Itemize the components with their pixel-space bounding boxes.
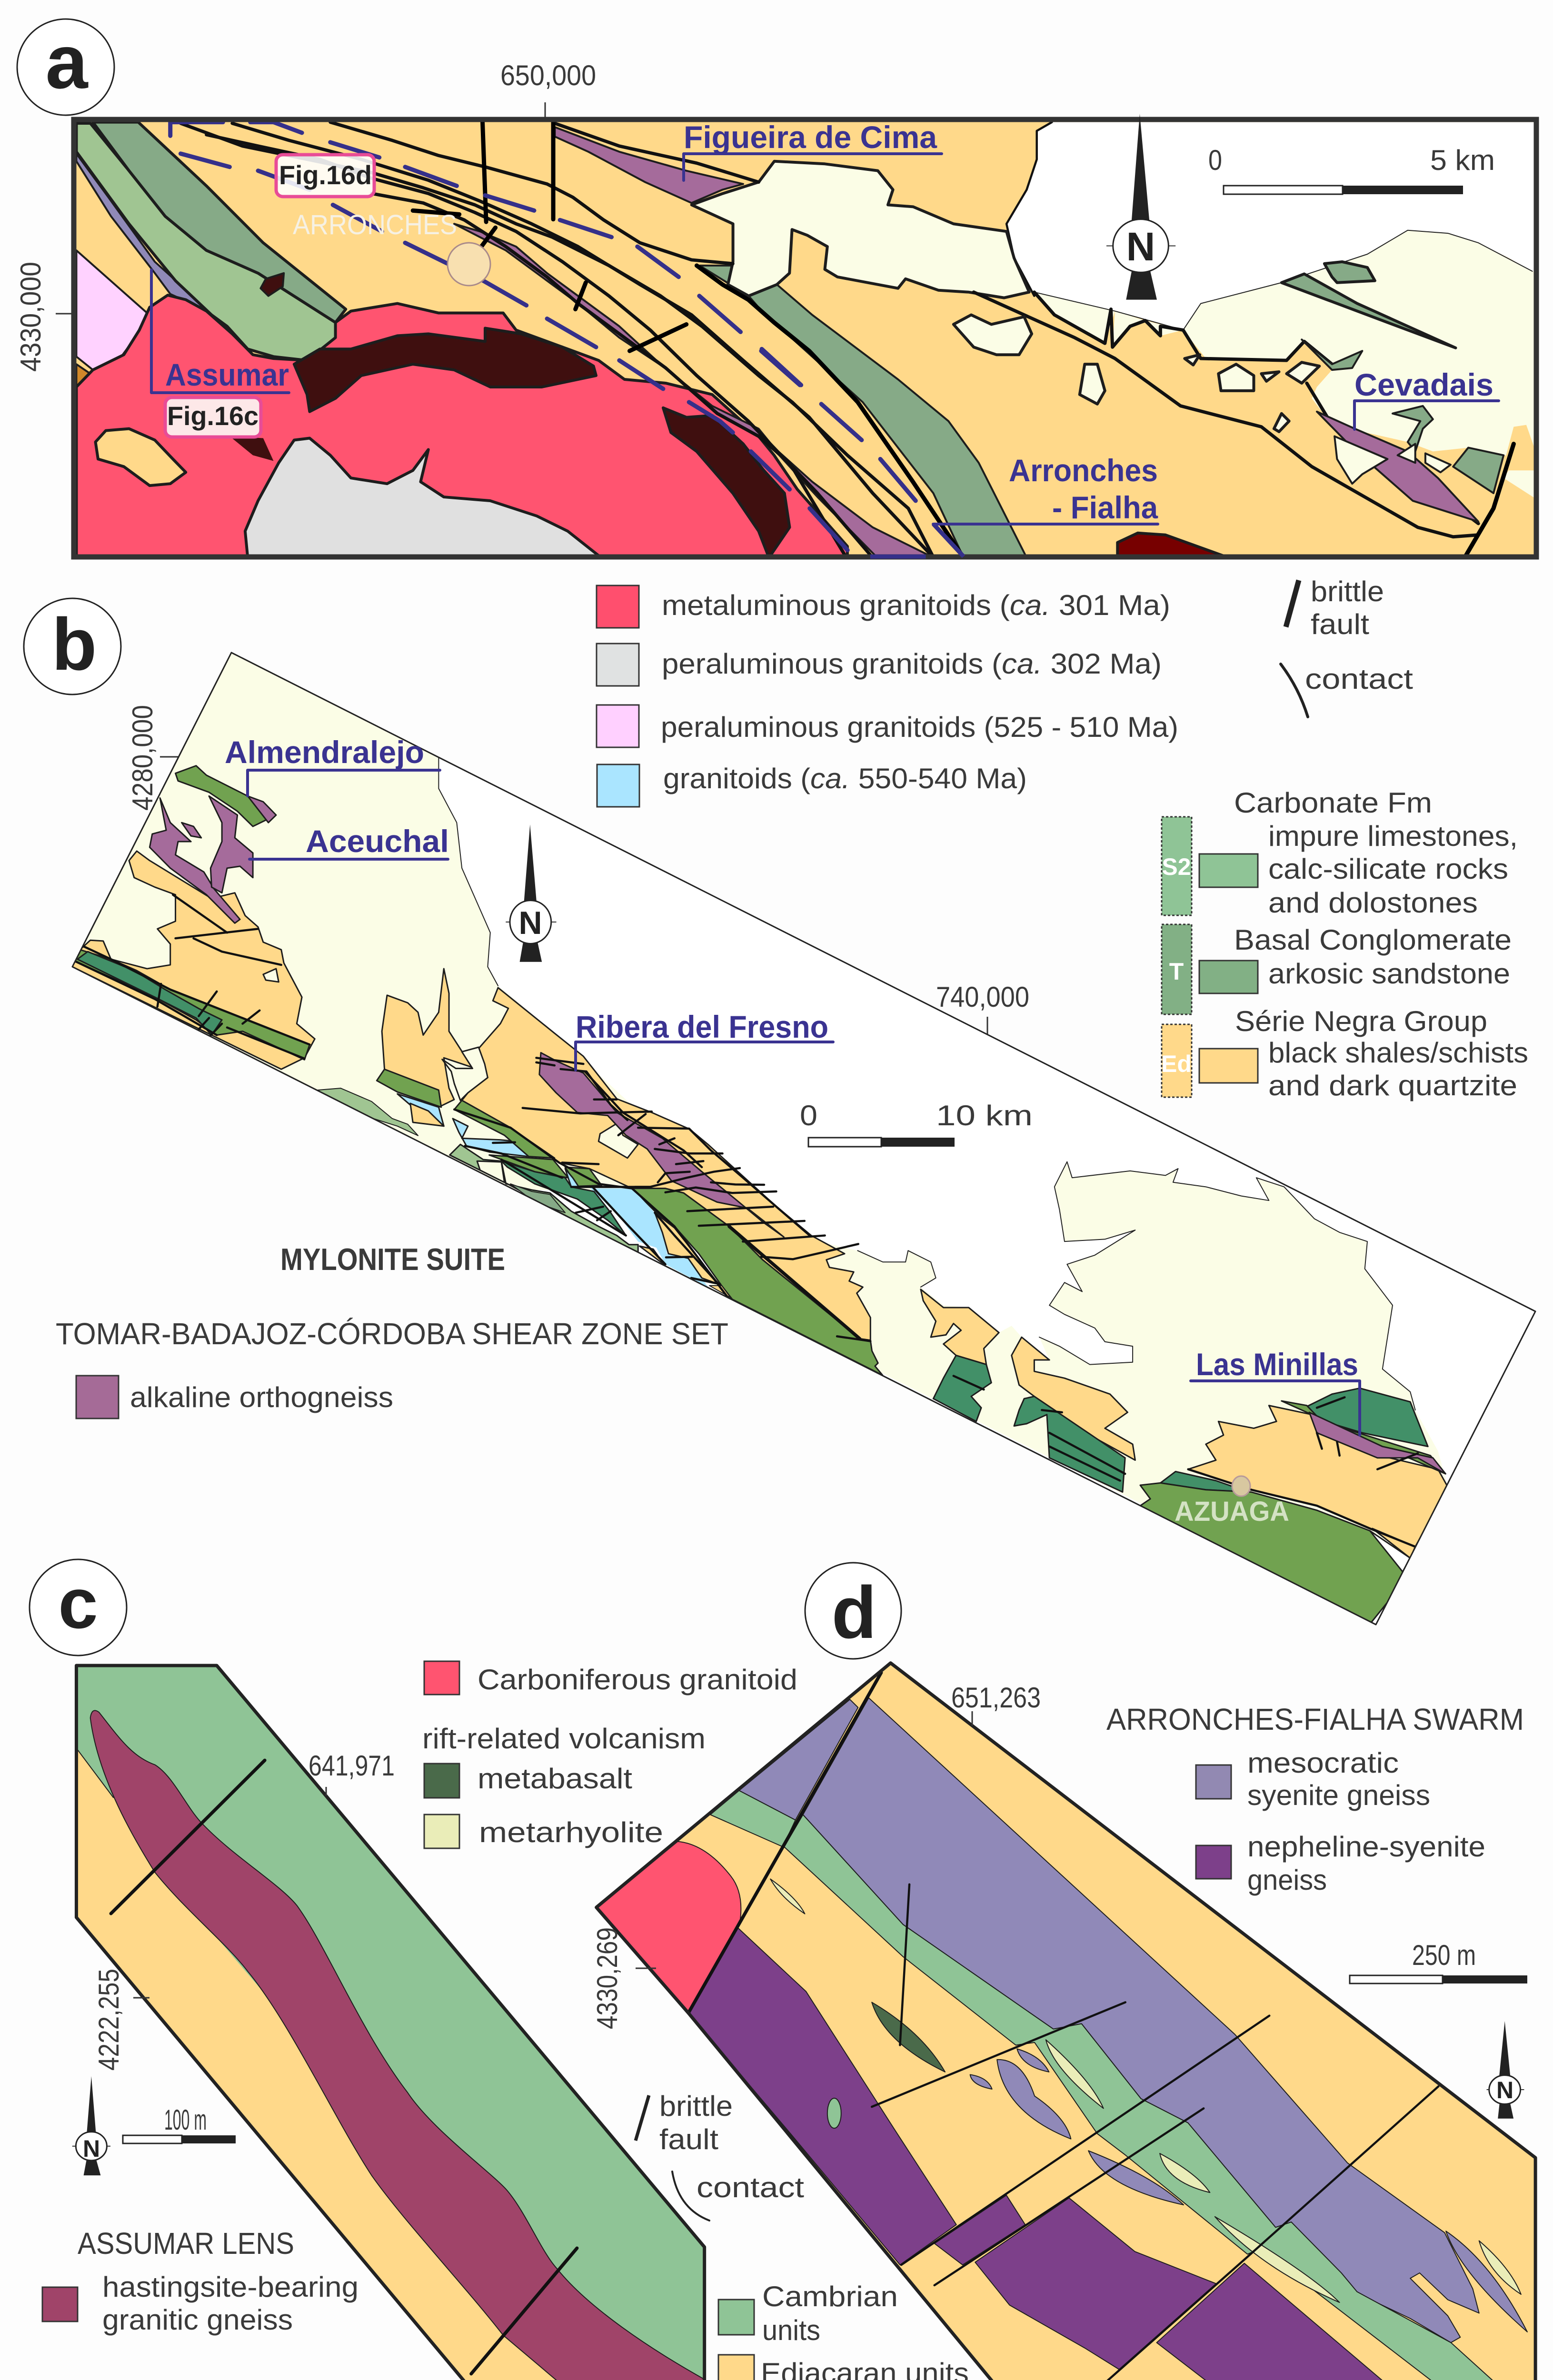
label: Arronches - Fialha: [933, 453, 1158, 525]
legend: granitoids: peraluminous granitoids ( ca. 302 Ma): [662, 648, 1162, 680]
legend: granitoid and volcanism: [422, 1661, 797, 1848]
legend: stratigraphic column: Série Negra Group: [1235, 1005, 1487, 1037]
heading: shear zone set: TOMAR-BADAJOZ-CÓRDOBA SHEAR ZONE SET: [56, 1317, 728, 1351]
legend: stratigraphic column: and dolostones: [1268, 887, 1478, 919]
legend: granitoids: [597, 585, 1178, 807]
panel: b shear zone map: [24, 598, 1535, 1625]
legend: stratigraphic column: calc-silicate rocks: [1268, 853, 1508, 885]
label: Aceuchal: Aceuchal: [306, 823, 449, 859]
label: ARRONCHES town: ARRONCHES: [293, 209, 457, 240]
legend: brittle fault and contact a: contact: [1305, 663, 1413, 695]
geological map b: [72, 653, 1535, 1625]
label: ARRONCHES town: [293, 209, 490, 286]
legend: nepheline-syenite gneiss: gneiss: [1247, 1864, 1327, 1896]
panel: d Arronches-Fialha swarm map: [591, 1563, 1535, 2380]
legend: alkaline orthogneiss: alkaline orthogneiss: [130, 1381, 393, 1413]
legend: brittle fault and contact c: fault: [659, 2123, 718, 2155]
northing tick 4280,000: 4280,000: [127, 705, 159, 811]
northing tick 4330,269: 4330,269: [591, 1927, 623, 2029]
label: Cevadais: Cevadais: [1354, 367, 1493, 402]
panel letter c: [30, 1559, 127, 1656]
label: Almendralejo: Almendralejo: [225, 734, 424, 770]
legend: stratigraphic column: black shales/schists: [1268, 1037, 1528, 1069]
legend: brittle fault and contact c: [636, 2090, 804, 2221]
map frame a: [74, 119, 1536, 557]
legend: brittle fault and contact c: contact: [697, 2172, 804, 2203]
scale bar c: 100 m: [164, 2104, 207, 2136]
geological map c: [76, 1666, 705, 2380]
legend: granitoid and volcanism: Carboniferous granitoid: [478, 1664, 797, 1696]
label: Cevadais: [1354, 367, 1499, 429]
label: Ribera del Fresno: [576, 1009, 833, 1070]
heading: Assumar lens: ASSUMAR LENS: [78, 2226, 294, 2261]
north arrow d: [1487, 2021, 1524, 2119]
north letter b: N: [518, 905, 542, 941]
legend: granitoids: metaluminous granitoids ( ca. 301 Ma): [662, 589, 1170, 621]
legend: hastingsite granitic gneiss: hastingsite-bearing: [102, 2271, 358, 2303]
north letter c: N: [83, 2135, 100, 2162]
blue tail on frame: [870, 524, 964, 556]
scale bar a: [1208, 144, 1495, 194]
scale bar d: [1350, 1939, 1527, 1983]
label: Figueira de Cima: [684, 119, 942, 180]
legend: hastingsite granitic gneiss: granitic gneiss: [102, 2304, 293, 2336]
geological map a: [74, 119, 1539, 558]
heading: mylonite suite: MYLONITE SUITE: [280, 1242, 505, 1277]
legend: granitoids: granitoids (ca. 550-540 Ma): [663, 763, 1027, 794]
label: Las Minillas: Las Minillas: [1196, 1347, 1358, 1382]
legend: granitoid and volcanism: metabasalt: [478, 1763, 632, 1795]
label: Almendralejo: [225, 734, 440, 796]
panel letter d: d: [832, 1571, 876, 1654]
legend: brittle fault and contact a: [1281, 575, 1413, 717]
dashed outline of detail areas: [170, 122, 916, 550]
panel letter d: [805, 1563, 901, 1659]
legend: alkaline orthogneiss: [76, 1376, 393, 1418]
label: Arronches - Fialha: - Fialha: [1052, 490, 1158, 525]
legend: stratigraphic column: T: [1169, 958, 1184, 985]
scale bar a: 5 km: [1430, 144, 1495, 176]
north arrow b: [506, 824, 557, 962]
map frame b: [72, 653, 1535, 1625]
legend: Cambrian and Ediacaran units: [718, 2281, 969, 2380]
legend: granitoid and volcanism: metarhyolite: [479, 1816, 663, 1848]
legend: Cambrian and Ediacaran units: units: [762, 2314, 820, 2346]
scale bar d: 250 m: [1412, 1939, 1476, 1971]
label: Fig.16d: [276, 155, 374, 197]
label: Assumar: Assumar: [165, 357, 289, 392]
legend: stratigraphic column: Ed: [1161, 1051, 1192, 1077]
legend: hastingsite granitic gneiss: [42, 2271, 358, 2336]
panel: c Assumar lens map: [30, 1559, 705, 2380]
legend: mesocratic syenite gneiss: syenite gneiss: [1247, 1779, 1430, 1811]
legend: brittle fault and contact a: fault: [1311, 608, 1369, 640]
legend: brittle fault and contact a: brittle: [1311, 575, 1384, 607]
north arrow a: [1106, 114, 1175, 300]
scale bar a: 0: [1208, 144, 1222, 176]
easting tick 641,971: 641,971: [309, 1750, 395, 1782]
label: Arronches - Fialha: Arronches: [1009, 453, 1158, 488]
legend: stratigraphic column: and dark quartzite: [1268, 1070, 1517, 1101]
legend: brittle fault and contact c: brittle: [659, 2090, 733, 2122]
easting tick 740,000: 740,000: [936, 981, 1029, 1013]
north letter a: N: [1126, 224, 1155, 269]
panel letter b: b: [52, 603, 97, 685]
legend: mesocratic syenite gneiss: [1196, 1747, 1430, 1811]
legend: nepheline-syenite gneiss: [1196, 1831, 1485, 1896]
legend: stratigraphic column: Carbonate Fm: [1234, 787, 1432, 819]
label: Ribera del Fresno: Ribera del Fresno: [576, 1009, 828, 1044]
scale bar c: [123, 2104, 236, 2143]
geological map d: [597, 1663, 1535, 2380]
north letter d: N: [1496, 2077, 1513, 2103]
legend: stratigraphic column: [1161, 787, 1528, 1101]
scale bar b: 10 km: [936, 1100, 1033, 1131]
scale bar b: [800, 1100, 1033, 1147]
scale bar b: 0: [800, 1100, 817, 1131]
label: AZUAGA town: AZUAGA: [1175, 1496, 1289, 1527]
legend: granitoid and volcanism: rift-related volcanism: [422, 1723, 706, 1755]
legend: nepheline-syenite gneiss: nepheline-syenite: [1247, 1831, 1485, 1863]
legend: stratigraphic column: impure limestones,: [1268, 820, 1518, 852]
panel letter c: c: [58, 1563, 98, 1643]
legend: stratigraphic column: S2: [1162, 853, 1191, 880]
panel: a Arronches map: [15, 19, 1539, 558]
heading: Arronches-Fialha swarm: ARRONCHES-FIALHA SWARM: [1106, 1702, 1524, 1736]
label: Fig.16d: Fig.16d: [279, 160, 372, 190]
northing tick 4222,255: 4222,255: [93, 1969, 125, 2071]
northing tick 4330,000: 4330,000: [15, 262, 47, 372]
north arrow c: [72, 2076, 110, 2175]
label: Fig.16c: Fig.16c: [167, 401, 259, 431]
legend: Cambrian and Ediacaran units: Cambrian: [762, 2281, 898, 2312]
legend: granitoids: peraluminous granitoids (525 - 510 Ma): [661, 711, 1178, 743]
label: Las Minillas: [1191, 1347, 1360, 1435]
easting tick 651,263: 651,263: [951, 1682, 1041, 1714]
panel letter a: [17, 19, 114, 115]
easting tick 650,000: 650,000: [500, 60, 596, 91]
legend: mesocratic syenite gneiss: mesocratic: [1247, 1747, 1399, 1779]
panel letter b: [24, 598, 121, 694]
legend: stratigraphic column: arkosic sandstone: [1268, 958, 1510, 990]
legend: stratigraphic column: Basal Conglomerate: [1234, 924, 1512, 956]
panel letter a: a: [46, 19, 89, 104]
label: Figueira de Cima: Figueira de Cima: [684, 119, 937, 155]
label: Assumar: [151, 270, 289, 393]
